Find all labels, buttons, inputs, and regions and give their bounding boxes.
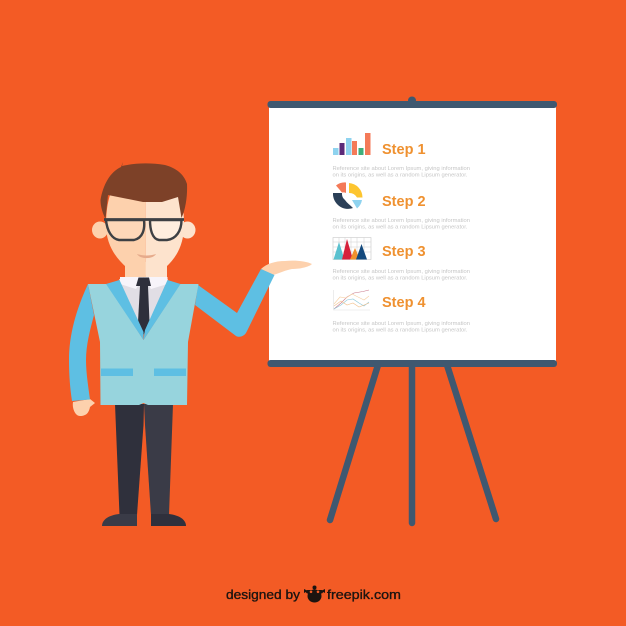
footer credit (226, 586, 401, 602)
step 3 block (332, 238, 470, 282)
step 1 heading: Step 1 (382, 142, 426, 158)
shirt (119, 279, 168, 335)
step 1 description (332, 166, 470, 178)
collar (120, 277, 168, 289)
board knob (408, 96, 416, 104)
white board panel (269, 106, 556, 362)
step 2 description (332, 218, 470, 230)
easel legs (330, 365, 496, 523)
icon: donut chart (333, 182, 363, 209)
ears (92, 222, 108, 238)
face (106, 178, 146, 275)
icon: peak chart (333, 238, 371, 260)
trousers (115, 404, 173, 515)
step 3 description: Reference site about Lorem Ipsum, giving information (332, 269, 470, 275)
board bottom bar (268, 360, 557, 367)
left hand (73, 399, 95, 416)
pockets (101, 368, 186, 376)
lapels (106, 280, 180, 340)
step 3 heading: Step 3 (382, 244, 426, 260)
step 4 description: on its origins, as well as a random Lipsum generator. (332, 328, 468, 334)
step 4 description (332, 321, 470, 334)
step 3 description: on its origins, as well as a random Lipsum generator. (332, 276, 468, 282)
step 1 description: Reference site about Lorem Ipsum, giving information (332, 166, 470, 172)
step 2 description: on its origins, as well as a random Lipsum generator. (332, 224, 468, 230)
step 4 description: Reference site about Lorem Ipsum, giving information (332, 321, 470, 327)
step 2 block (332, 182, 470, 230)
step 2 heading: Step 2 (382, 194, 426, 210)
necktie (136, 278, 151, 335)
neck (125, 262, 167, 282)
icon: line chart (334, 290, 370, 310)
head (92, 162, 196, 275)
freepik text: freepik.com (327, 587, 401, 602)
step 1 block (332, 133, 470, 178)
icon: bar chart (333, 133, 370, 155)
easel board (268, 96, 557, 523)
glasses (104, 220, 184, 240)
icon: freepik logo (304, 586, 325, 602)
right hand (261, 261, 312, 275)
presenter character (69, 162, 312, 526)
step 2 description: Reference site about Lorem Ipsum, giving information (332, 218, 470, 224)
mouth (137, 254, 156, 258)
step 4 block (332, 290, 470, 334)
shoes (102, 514, 186, 526)
designed by text: designed by (226, 587, 301, 602)
step 4 heading: Step 4 (382, 295, 426, 311)
step 1 description: on its origins, as well as a random Lipsum generator. (332, 172, 468, 178)
vest (88, 284, 198, 405)
step 3 description (332, 269, 470, 282)
left arm (69, 284, 94, 401)
hair (100, 162, 187, 219)
right arm (195, 269, 274, 337)
board top bar (268, 101, 557, 108)
